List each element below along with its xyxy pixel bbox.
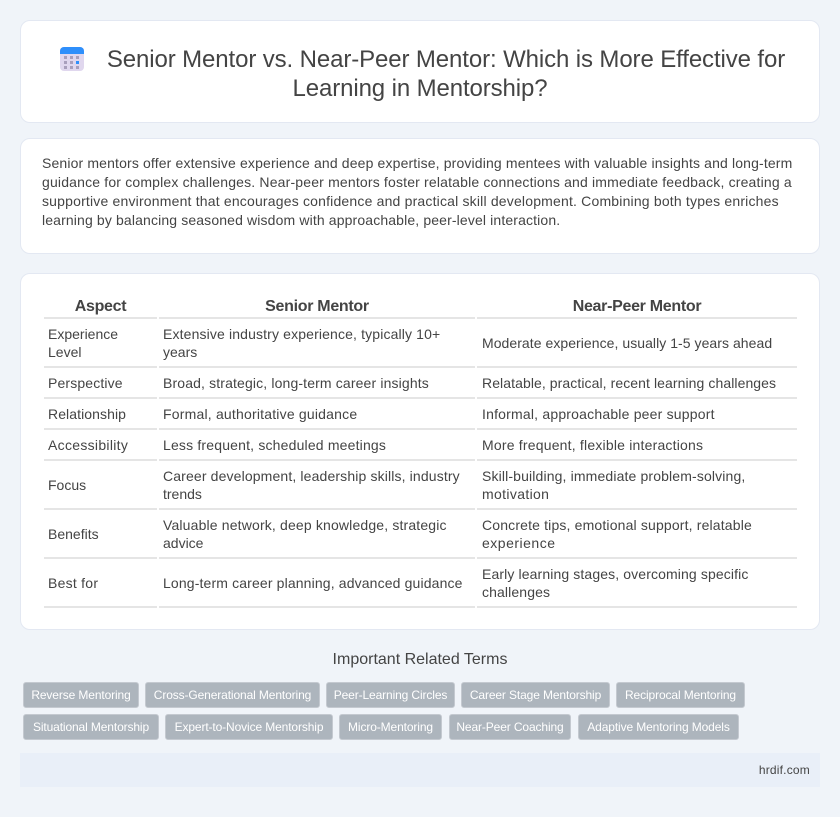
- intro paragraph: learning by balancing seasoned wisdom with approachable, peer-level interaction.: [42, 212, 560, 228]
- tag: [449, 714, 571, 740]
- row: relationship: Informal, approachable peer support: [482, 406, 715, 422]
- table header: [75, 298, 702, 315]
- row: focus: Skill-building, immediate problem-solving,: [482, 468, 745, 484]
- comparison table: [44, 298, 797, 608]
- tag: Cross-Generational Mentoring: [154, 688, 311, 702]
- intro paragraph: Senior mentors offer extensive experience and deep expertise, providing mentees with valuable insights and long-term: [42, 155, 792, 171]
- row: benefits: Concrete tips, emotional support, relatable: [482, 517, 752, 533]
- row: focus: motivation: [482, 486, 549, 502]
- tag: [23, 682, 139, 708]
- intro paragraph: [42, 155, 792, 228]
- row: accessibility: Less frequent, scheduled meetings: [163, 437, 386, 453]
- tag: Reverse Mentoring: [31, 688, 131, 702]
- table header: Near-Peer Mentor: [573, 298, 701, 315]
- row: focus: trends: [163, 486, 202, 502]
- title: [107, 46, 785, 102]
- tag: Micro-Mentoring: [348, 720, 433, 734]
- row: focus: Focus: [48, 477, 86, 493]
- row: best for: challenges: [482, 584, 550, 600]
- row: accessibility: More frequent, flexible interactions: [482, 437, 703, 453]
- tag: [145, 682, 320, 708]
- tag: Near-Peer Coaching: [456, 720, 564, 734]
- row: experience level: [48, 326, 772, 360]
- tag: [461, 682, 610, 708]
- panel: intro text: [20, 138, 820, 254]
- row: experience level: Moderate experience, usually 1-5 years ahead: [482, 335, 772, 351]
- row: best for: Early learning stages, overcoming specific: [482, 566, 748, 582]
- row: perspective: Broad, strategic, long-term career insights: [163, 375, 429, 391]
- table header: Aspect: [75, 298, 126, 315]
- row: best for: Best for: [48, 575, 98, 591]
- row: relationship: [48, 406, 715, 422]
- intro paragraph: supportive environment that encourages confidence and practical skill development. Combining both types enriches: [42, 193, 779, 209]
- row: benefits: Benefits: [48, 526, 99, 542]
- row: best for: Long-term career planning, advanced guidance: [163, 575, 463, 591]
- tag: [616, 682, 745, 708]
- title: Senior Mentor vs. Near-Peer Mentor: Which is More Effective for: [107, 46, 785, 73]
- tag: Expert-to-Novice Mentorship: [175, 720, 323, 734]
- tag: [23, 714, 159, 740]
- table header: Senior Mentor: [265, 298, 369, 315]
- tag: [578, 714, 739, 740]
- footer bar: [20, 753, 820, 787]
- row: experience level: Level: [48, 344, 81, 360]
- icon: calendar: [60, 47, 84, 71]
- row: relationship: Formal, authoritative guidance: [163, 406, 357, 422]
- row: relationship: Relationship: [48, 406, 126, 422]
- tag: Career Stage Mentorship: [470, 688, 601, 702]
- row: accessibility: Accessibility: [48, 437, 128, 453]
- title: Learning in Mentorship?: [293, 75, 547, 102]
- footer source: hrdif.com: [759, 763, 810, 777]
- row: experience level: Extensive industry experience, typically 10+: [163, 326, 440, 342]
- row: best for: [48, 566, 748, 600]
- row: accessibility: [48, 437, 703, 453]
- row: benefits: experience: [482, 535, 556, 551]
- row: benefits: advice: [163, 535, 203, 551]
- row: perspective: Perspective: [48, 375, 123, 391]
- panel: title card: [20, 20, 820, 123]
- row: experience level: years: [163, 344, 197, 360]
- tag: Situational Mentorship: [33, 720, 149, 734]
- row: benefits: [48, 517, 752, 551]
- tag: Peer-Learning Circles: [334, 688, 447, 702]
- row: focus: [48, 468, 745, 502]
- panel: comparison table: [20, 273, 820, 630]
- tag: [326, 682, 455, 708]
- row: perspective: [48, 375, 776, 391]
- row: experience level: Experience: [48, 326, 118, 342]
- related terms tags: [23, 682, 745, 740]
- row: perspective: Relatable, practical, recent learning challenges: [482, 375, 776, 391]
- tag: [165, 714, 333, 740]
- tag: [339, 714, 442, 740]
- heading: related terms: Important Related Terms: [333, 651, 507, 668]
- row: focus: Career development, leadership skills, industry: [163, 468, 460, 484]
- row: benefits: Valuable network, deep knowledge, strategic: [163, 517, 447, 533]
- tag: Adaptive Mentoring Models: [587, 720, 730, 734]
- intro paragraph: guidance for complex challenges. Near-peer mentors foster relatable connections and immediate feedback, creating a: [42, 174, 792, 190]
- tag: Reciprocal Mentoring: [625, 688, 736, 702]
